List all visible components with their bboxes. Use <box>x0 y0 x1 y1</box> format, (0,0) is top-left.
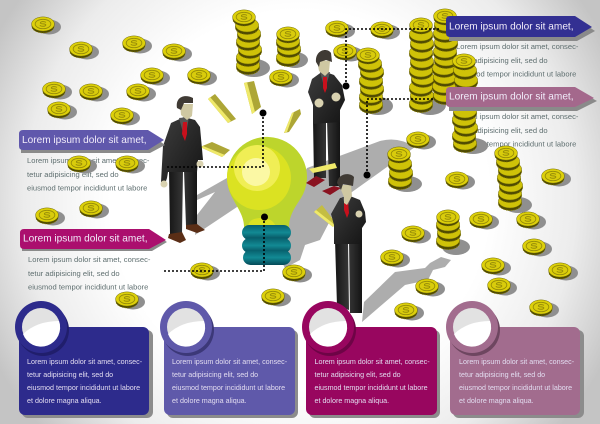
person: left businessman <box>160 96 205 243</box>
panel: card 2 purple: tetur adipisicing elit, sed do <box>172 371 258 379</box>
text block: right upper: Lorem ipsum dolor sit amet, consec- <box>456 42 579 51</box>
side text blocks <box>27 42 579 292</box>
gold bar <box>309 163 337 173</box>
icon: ring 2 <box>160 301 214 356</box>
text block: left lower: tetur adipisicing elit, sed do <box>28 269 120 278</box>
text block: left upper: Lorem ipsum dolor sit amet, consec- <box>27 156 150 165</box>
text block: left upper <box>27 156 150 192</box>
panel: card 4 mauve: eiusmod tempor incididunt ut labore <box>459 384 572 392</box>
text block: right lower <box>456 112 579 148</box>
panel: card 2 purple <box>160 301 298 418</box>
panel: card 3 magenta <box>302 301 440 418</box>
leader line end dots <box>260 82 370 220</box>
person: back businessman <box>306 50 345 195</box>
panel: card 3 magenta: Lorem ipsum dolor sit amet, consec- <box>314 358 430 366</box>
icon: ring 3 <box>302 301 356 356</box>
panel: card 1 navy: et dolore magna aliqua. <box>27 397 102 405</box>
icon: ring 1 <box>15 301 69 356</box>
panel: card 1 navy: Lorem ipsum dolor sit amet, consec- <box>27 358 143 366</box>
ribbon: magenta <box>20 229 167 251</box>
text block: right upper: eiusmod tempor incididunt ut labore <box>456 70 576 78</box>
dotted leader lines <box>163 29 440 271</box>
panel: card 2 purple: eiusmod tempor incididunt ut labore <box>172 384 285 392</box>
panel: card 3 magenta: eiusmod tempor incididunt ut labore <box>314 384 428 392</box>
text block: right upper: tetur adipisicing elit, sed do <box>456 56 548 65</box>
icon: light rays (gold bars) <box>200 81 335 227</box>
text block: right lower: tetur adipisicing elit, sed do <box>456 126 548 135</box>
panel: card 1 navy: eiusmod tempor incididunt ut labore <box>27 384 140 392</box>
panel: card 4 mauve <box>446 301 584 418</box>
bulb base <box>242 225 291 265</box>
text block: left upper: eiusmod tempor incididunt ut labore <box>27 184 147 192</box>
light bulb <box>227 137 307 265</box>
panel: card 2 purple: Lorem ipsum dolor sit amet, consec- <box>172 358 288 366</box>
ribbon: magenta: Lorem ipsum dolor sit amet, <box>23 234 148 244</box>
panel: card 4 mauve: Lorem ipsum dolor sit amet, consec- <box>459 358 575 366</box>
panel: card 4 mauve: et dolore magna aliqua. <box>459 397 534 405</box>
text block: left lower: eiusmod tempor incididunt ut labore <box>28 282 148 292</box>
ribbon: navy <box>446 16 595 41</box>
cast shadows of bulb and people <box>195 139 451 322</box>
text block: left lower <box>28 255 151 292</box>
scattered coins <box>32 17 578 321</box>
coin stacks <box>233 9 532 255</box>
ribbon: mauve: Lorem ipsum dolor sit amet, <box>449 92 574 102</box>
person: front businessman <box>331 174 366 313</box>
panel: card 3 magenta: tetur adipisicing elit, sed do <box>314 371 401 379</box>
text block: right lower: Lorem ipsum dolor sit amet, consec- <box>456 112 579 121</box>
ribbon: mauve <box>446 87 597 111</box>
text block: left lower: Lorem ipsum dolor sit amet, consec- <box>28 255 151 264</box>
panel: card 3 magenta: et dolore magna aliqua. <box>314 397 389 405</box>
panel: card 1 navy <box>15 301 153 418</box>
panel: card 4 mauve: tetur adipisicing elit, sed do <box>459 371 545 379</box>
panel: card 2 purple: et dolore magna aliqua. <box>172 397 247 405</box>
ribbon: purple <box>19 130 165 153</box>
text block: right upper <box>456 42 579 78</box>
panel: card 1 navy: tetur adipisicing elit, sed do <box>27 371 113 379</box>
text block: right lower: eiusmod tempor incididunt ut labore <box>456 140 576 148</box>
text block: left upper: tetur adipisicing elit, sed do <box>27 170 119 179</box>
ribbon: navy: Lorem ipsum dolor sit amet, <box>449 22 574 32</box>
icon: ring 4 <box>446 301 500 356</box>
ribbon: purple: Lorem ipsum dolor sit amet, <box>22 135 147 146</box>
